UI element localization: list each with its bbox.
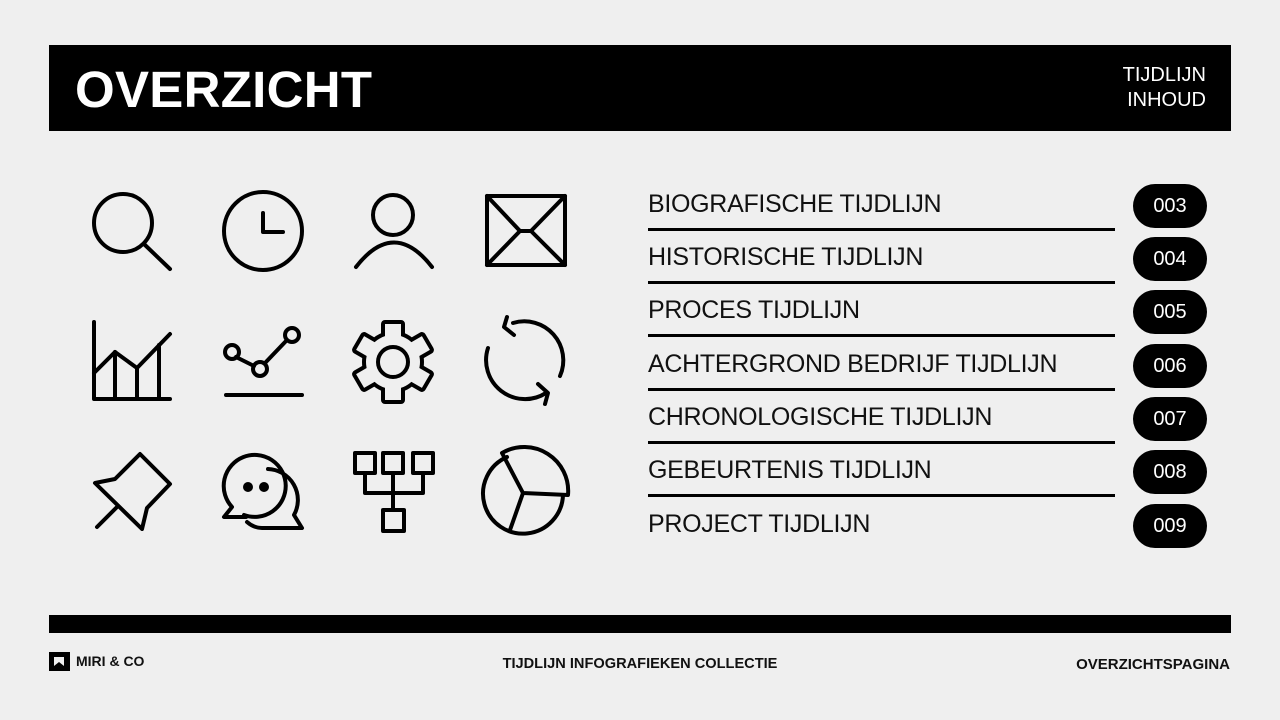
- icon: hierarchy: [355, 453, 433, 531]
- row 1: 003: [1153, 195, 1187, 217]
- icon: logo: [49, 652, 70, 671]
- footer right text: OVERZICHTSPAGINA: [1076, 656, 1230, 673]
- header bar: [49, 45, 1231, 131]
- row 1: [648, 184, 1207, 231]
- row 6: 008: [1153, 461, 1187, 483]
- row 3: [648, 290, 1207, 337]
- icon: clock: [224, 192, 302, 270]
- row 7: 009: [1153, 515, 1187, 537]
- row 4: [648, 344, 1207, 391]
- icon: pie chart: [483, 447, 568, 534]
- footer bar: [49, 615, 1231, 633]
- icon: person: [356, 195, 432, 267]
- row 7: [648, 504, 1207, 548]
- icon: bar chart: [94, 322, 170, 399]
- row 5: 007: [1153, 408, 1187, 430]
- icon: gear: [356, 324, 430, 400]
- row 2: [648, 237, 1207, 284]
- row 5: [648, 397, 1207, 444]
- header subtitle: [1123, 64, 1206, 111]
- row 5: CHRONOLOGISCHE TIJDLIJN: [648, 403, 992, 431]
- header subtitle: TIJDLIJN: [1123, 64, 1206, 86]
- row 3: 005: [1153, 301, 1187, 323]
- icon: search: [94, 194, 170, 269]
- row 7: PROJECT TIJDLIJN: [648, 510, 870, 538]
- row 6: GEBEURTENIS TIJDLIJN: [648, 456, 931, 484]
- row 4: 006: [1153, 355, 1187, 377]
- row 4: ACHTERGROND BEDRIJF TIJDLIJN: [648, 350, 1057, 378]
- footer logo: MIRI & CO: [76, 653, 144, 669]
- list: timelines: [648, 184, 1207, 548]
- row 2: HISTORISCHE TIJDLIJN: [648, 243, 923, 271]
- header subtitle: INHOUD: [1127, 89, 1206, 111]
- row 1: BIOGRAFISCHE TIJDLIJN: [648, 190, 941, 218]
- row 3: PROCES TIJDLIJN: [648, 296, 860, 324]
- footer logo: [49, 652, 144, 671]
- icon: chat: [224, 455, 302, 528]
- icon: envelope: [487, 196, 565, 265]
- footer center text: TIJDLIJN INFOGRAFIEKEN COLLECTIE: [503, 656, 777, 672]
- icon grid: [92, 190, 570, 536]
- icon: line chart: [225, 328, 302, 395]
- icon: pushpin: [95, 454, 170, 529]
- title: OVERZICHT: [75, 61, 372, 118]
- icon: refresh: [486, 317, 563, 404]
- row 6: [648, 450, 1207, 497]
- row 2: 004: [1153, 248, 1187, 270]
